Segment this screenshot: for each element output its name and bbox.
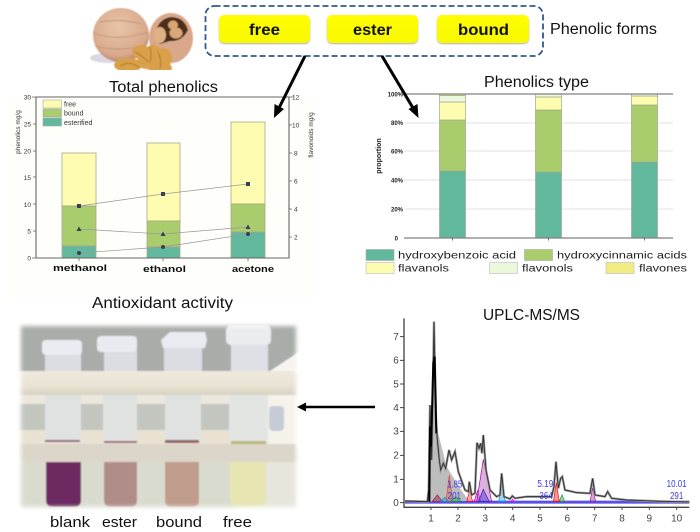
peak annotations: 1.85 (447, 480, 463, 491)
legend: flavanols (398, 264, 449, 274)
x axis numbers: 4 (510, 514, 516, 525)
left axis numbers: 30 (24, 94, 31, 102)
bar 1 (440, 94, 466, 238)
heading: phenolics type: Phenolics type (484, 74, 589, 91)
arrow: forms to phenolics type (382, 56, 418, 118)
peak annotations: 364 (539, 491, 553, 502)
y axis numbers: 7 (393, 332, 399, 343)
y axis numbers: 4 (393, 403, 399, 414)
chart: chromatogram (393, 318, 689, 525)
axis title: proportion (376, 138, 383, 174)
axis numbers: 40% (391, 178, 404, 184)
button: free (219, 15, 310, 43)
y axis numbers (393, 332, 399, 509)
heading: total phenolics: Total phenolics (109, 79, 218, 96)
x axis numbers: 9 (647, 514, 653, 525)
left axis numbers (24, 94, 31, 262)
dark peak core (429, 357, 436, 502)
right axis numbers: 10 (292, 122, 300, 130)
y axis numbers: 3 (393, 427, 399, 438)
axes (404, 318, 689, 507)
legend: hydroxybenzoic acid (398, 250, 516, 262)
right axis numbers: 6 (294, 178, 298, 186)
photo: test tubes (15, 320, 305, 515)
chart: total phenolics (10, 94, 315, 298)
grey area peak (429, 353, 468, 502)
category labels: ethanol (143, 264, 186, 275)
left axis numbers: 10 (24, 202, 31, 209)
baseline band (405, 501, 689, 504)
right axis numbers: 2 (294, 234, 298, 242)
axis numbers: 20% (391, 208, 404, 214)
peak annotations: 5.19 (537, 479, 554, 490)
category labels: methanol (53, 263, 107, 274)
tube labels (50, 514, 252, 531)
right axis numbers: 4 (294, 206, 298, 214)
left axis numbers: 0 (27, 256, 31, 262)
arrow: chromatogram to photo (297, 402, 375, 412)
tube labels: free (223, 514, 252, 531)
coloured peaks (432, 459, 596, 502)
right axis numbers: 8 (294, 150, 298, 158)
panel: phenolic forms (206, 6, 543, 56)
x axis numbers: 7 (592, 514, 598, 525)
rack bar upper (15, 371, 297, 395)
y axis numbers: 5 (393, 379, 399, 390)
tube labels: blank (50, 514, 91, 531)
peak annotations: 201 (448, 491, 461, 502)
chart: phenolics type (366, 92, 687, 274)
bar 2 (536, 94, 562, 238)
right axis numbers: 12 (292, 94, 300, 102)
left axis numbers: 20 (24, 148, 31, 156)
x axis numbers: 2 (455, 514, 461, 525)
axis numbers (388, 92, 404, 242)
axis numbers: 100% (388, 92, 404, 98)
y axis numbers: 2 (393, 451, 399, 462)
heading: phenolic forms: Phenolic forms (550, 21, 657, 38)
arrow: forms to total phenolics (274, 56, 305, 118)
x axis numbers: 5 (537, 514, 543, 525)
heading: UPLC-MS/MS: UPLC-MS/MS (483, 307, 580, 324)
grey trace halo (405, 322, 689, 502)
right axis title: flavonoids mg/g (308, 112, 315, 158)
x axis numbers: 3 (483, 514, 489, 525)
legend: flavones (639, 264, 687, 274)
left axis title: phenolics mg/g (15, 110, 22, 154)
x axis numbers: 6 (565, 514, 571, 525)
tube bound (161, 332, 207, 507)
methanol bar (62, 153, 96, 258)
x axis numbers: 8 (619, 514, 625, 525)
acetone bar (231, 122, 265, 258)
legend: flavonols (522, 264, 573, 274)
tube ester (97, 336, 137, 507)
legend: esterified (64, 120, 93, 127)
left axis numbers: 25 (24, 122, 31, 128)
legend: bound (64, 110, 84, 118)
rack bar lower (15, 444, 297, 462)
button: free: free (249, 22, 280, 39)
legend (43, 100, 93, 127)
button: bound (437, 15, 529, 43)
axes (404, 94, 673, 238)
axis numbers: 80% (391, 121, 404, 127)
y axis numbers: 6 (393, 356, 399, 367)
bar 3 (632, 94, 658, 238)
button: bound: bound (458, 22, 509, 39)
button: ester: ester (353, 22, 392, 39)
x axis numbers (428, 514, 683, 525)
tube free (226, 325, 271, 507)
peak annotations (447, 479, 687, 502)
tube blank (42, 340, 82, 507)
black trace (405, 322, 689, 502)
right axis numbers (292, 94, 300, 242)
category labels: acetone (232, 264, 274, 275)
heading: antioxidant activity: Antioxidant activity (92, 295, 233, 312)
axes (36, 97, 289, 258)
x axis numbers: 10 (671, 514, 683, 525)
button: ester (327, 15, 418, 43)
peak annotations: 10.01 (667, 479, 687, 490)
tube labels: ester (102, 514, 137, 531)
flavonoid markers (76, 182, 250, 255)
legend: hydroxycinnamic acids (557, 250, 687, 262)
flavonoid lines (79, 184, 248, 253)
left axis numbers: 15 (24, 175, 31, 182)
ethanol bar (147, 143, 180, 258)
y axis numbers: 1 (393, 475, 399, 486)
icon: walnuts (90, 8, 193, 74)
axis numbers: 0 (395, 236, 399, 242)
category labels (53, 263, 274, 275)
legend: free (64, 102, 76, 108)
legend (366, 250, 687, 274)
x axis numbers: 1 (428, 514, 434, 525)
y axis numbers: 0 (393, 498, 399, 509)
left axis numbers: 5 (27, 228, 31, 236)
tube labels: bound (156, 514, 202, 531)
axis numbers: 60% (391, 150, 404, 156)
peak annotations: 291 (670, 491, 684, 502)
